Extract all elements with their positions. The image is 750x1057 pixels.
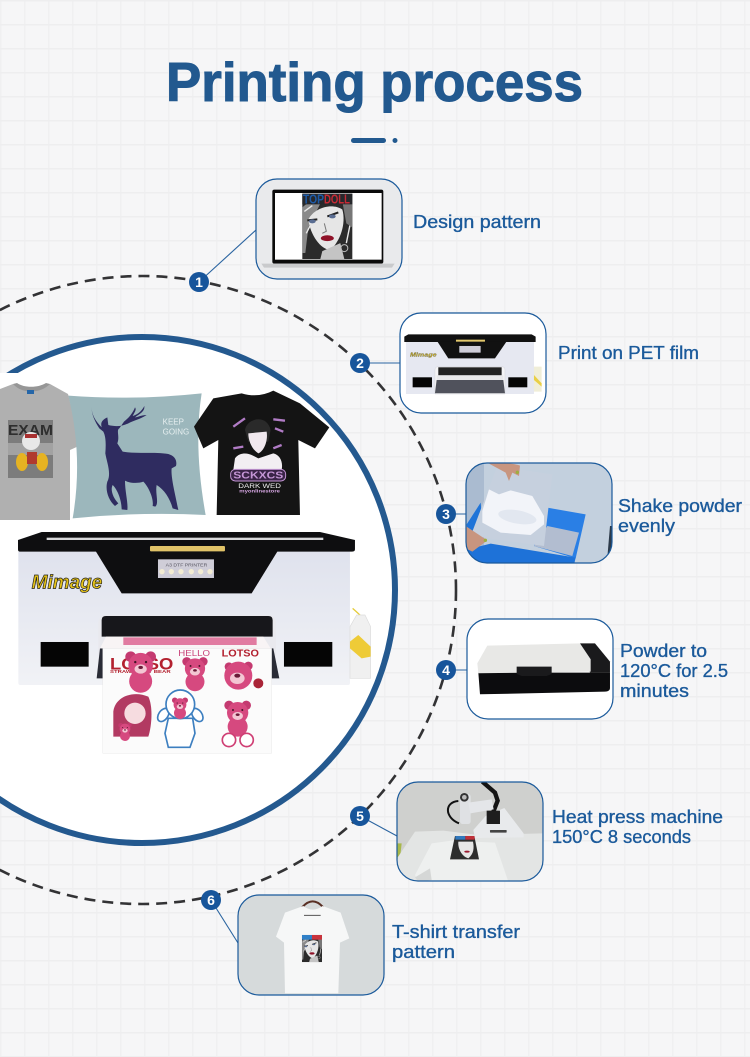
printed film sheet: LOTSO	[222, 649, 259, 660]
product: black t-shirt: myonlinestore	[239, 489, 281, 494]
step badge 2	[350, 353, 370, 373]
title: Printing process	[166, 51, 583, 113]
step 6 label: T-shirt transfer	[392, 922, 520, 942]
product: deer pillow	[68, 393, 206, 518]
main DTF printer	[18, 532, 371, 753]
step 5 label: Heat press machine	[552, 807, 723, 827]
step 3 frame	[466, 463, 612, 563]
control panel: A3 DTF PRINTER	[166, 562, 208, 568]
printer lid	[18, 532, 355, 552]
title underline	[351, 138, 398, 143]
step 1 image: laptop: DOLL	[324, 193, 350, 207]
step badge 5	[350, 806, 370, 826]
gold handle	[150, 546, 225, 551]
step 2 connector	[360, 362, 400, 364]
step 5 connector	[360, 816, 397, 836]
step badge 2: 2	[356, 355, 364, 371]
step 6 image: finished t-shirt	[238, 895, 384, 995]
step 3 label: evenly	[618, 516, 675, 536]
printer windows	[41, 642, 332, 667]
step 4 label: minutes	[620, 681, 689, 701]
step badge 3: 3	[442, 506, 450, 522]
step badge 1: 1	[195, 274, 203, 290]
step 6 label	[392, 922, 520, 962]
printed film sheet: HELLO	[178, 648, 210, 658]
step 4 label: Powder to	[620, 641, 707, 661]
product: black t-shirt	[194, 391, 329, 515]
step 3 label	[618, 496, 742, 536]
dashed process ring	[0, 276, 456, 904]
step 6 label: pattern	[392, 942, 455, 962]
product: black t-shirt: SCKXCS	[233, 471, 284, 482]
step 6 connector	[211, 900, 238, 943]
control panel	[158, 559, 214, 578]
printed film sheet	[100, 637, 272, 753]
step 2 image: printer	[400, 313, 546, 413]
step 3 connector	[446, 513, 466, 515]
step 2 image: printer: Mimage	[410, 353, 437, 359]
transfer print	[450, 836, 479, 859]
Mimage logo: Mimage	[32, 572, 103, 593]
step 3 label: Shake powder	[618, 496, 742, 516]
printer control recess	[95, 550, 278, 593]
step 3 image: shaking powder	[464, 461, 614, 565]
step badge 4: 4	[442, 662, 450, 678]
step 1 frame	[256, 179, 402, 279]
main circle panel	[0, 337, 395, 843]
product: black t-shirt: DARK WED	[238, 483, 281, 490]
step badge 6	[201, 890, 221, 910]
product: gray t-shirt: EXAM	[8, 422, 53, 439]
step badge 1	[189, 272, 209, 292]
step 1 label: Design pattern	[413, 212, 541, 232]
ink bottle	[350, 608, 371, 678]
step 1 image: laptop	[254, 177, 404, 281]
step 4 connector	[446, 669, 467, 671]
step badge 5: 5	[356, 808, 364, 824]
product: deer pillow: GOING	[163, 428, 189, 437]
product: gray t-shirt	[0, 383, 81, 520]
step 5 frame	[397, 782, 543, 881]
step 1 image: laptop: TOP	[303, 193, 324, 207]
step badge 6: 6	[207, 892, 215, 908]
step 6 frame	[238, 895, 384, 995]
step 4 image: powder oven	[467, 619, 613, 719]
heat press machine	[448, 782, 524, 838]
astronaut bear	[155, 690, 205, 747]
step 4 label: 120°C for 2.5	[620, 661, 728, 681]
step 4 label	[620, 641, 728, 701]
step badge 3	[436, 504, 456, 524]
step 5 label	[552, 807, 723, 847]
printed film sheet: LOTSO	[110, 654, 173, 673]
product: deer pillow: KEEP	[163, 418, 184, 427]
step 1 connector	[199, 230, 256, 282]
step 4 frame	[467, 619, 613, 719]
step 2 frame	[400, 313, 546, 413]
step 2 label: Print on PET film	[558, 343, 699, 363]
paper slot	[98, 615, 276, 678]
step badge 4	[436, 660, 456, 680]
step 5 label: 150°C 8 seconds	[552, 827, 691, 847]
printed film sheet: STRAWBERRY BEAR	[110, 669, 171, 674]
step 5 image: heat press	[395, 780, 545, 884]
